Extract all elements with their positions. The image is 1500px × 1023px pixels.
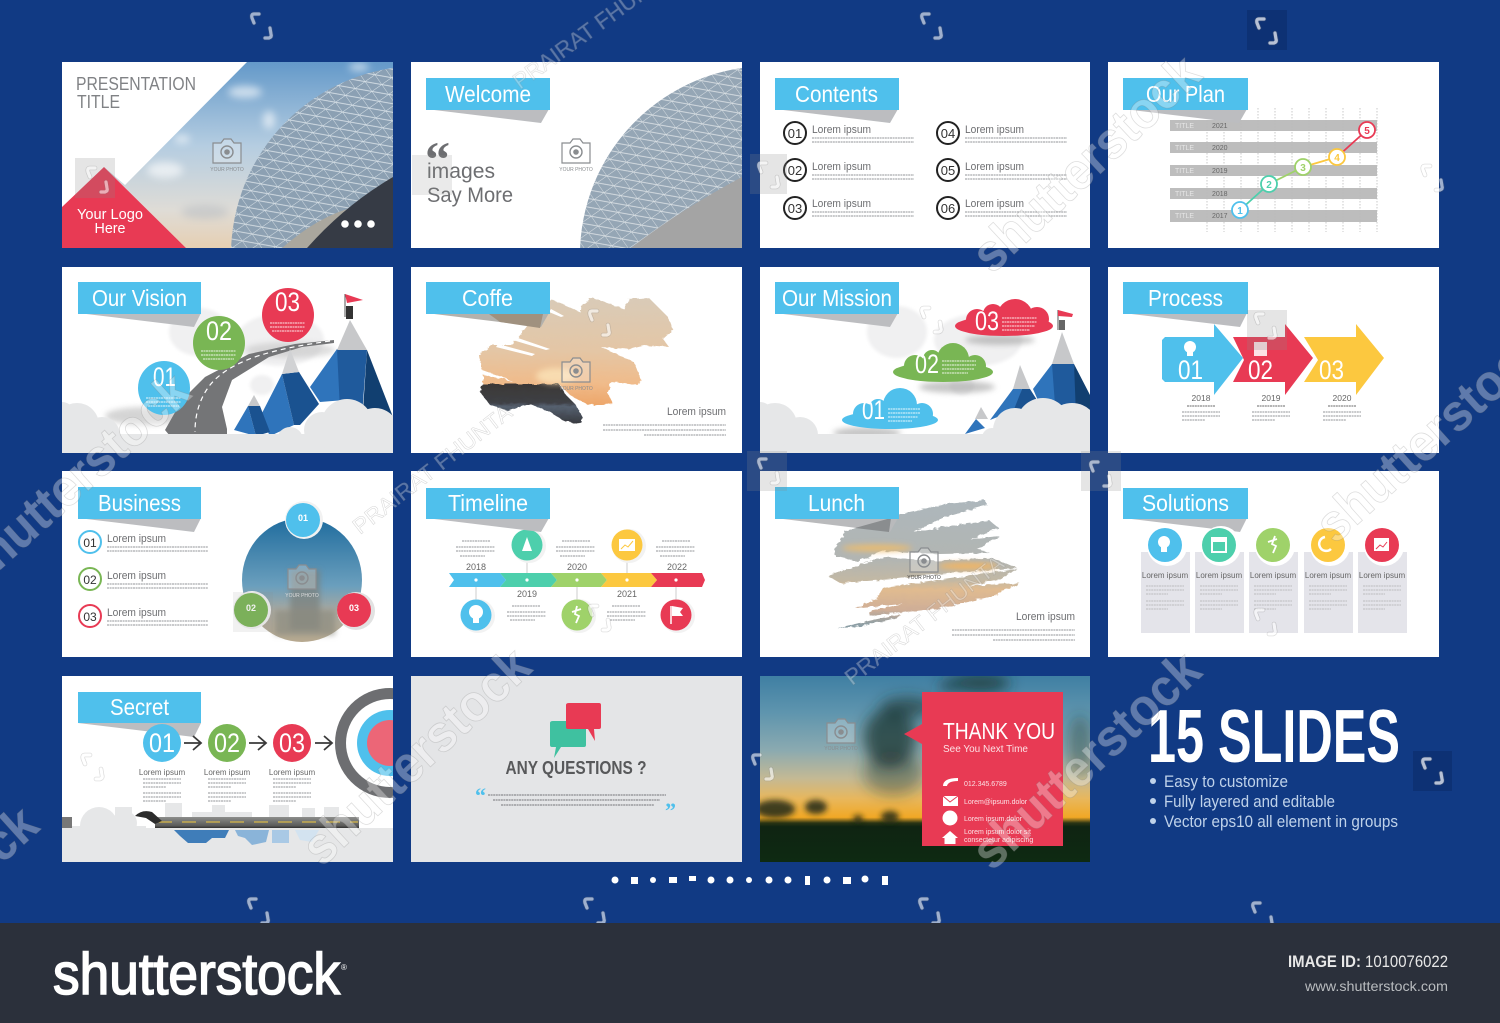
camera placeholder: YOUR PHOTO — [210, 167, 244, 173]
plan row labels: 2017 — [1212, 213, 1228, 220]
image id: IMAGE ID: 1010076022 — [1288, 952, 1448, 971]
quote — [475, 783, 676, 823]
target — [335, 688, 393, 798]
camera placeholder: YOUR PHOTO — [559, 167, 593, 173]
node 01: 01 — [298, 513, 308, 523]
world map — [867, 306, 1022, 395]
header: our plan — [1123, 78, 1248, 123]
plan milestones — [1232, 122, 1375, 218]
cloud shadows — [833, 335, 1035, 439]
circle 02 — [193, 316, 245, 370]
camera placeholder — [559, 358, 593, 392]
plan row labels: 2021 — [1212, 123, 1228, 130]
years: 2022 — [667, 562, 687, 572]
camera placeholder: YOUR PHOTO — [559, 386, 593, 392]
step text: Lorem ipsum — [139, 768, 185, 777]
slide: coffe — [411, 267, 742, 453]
cloud 02 — [893, 343, 993, 382]
step text: Lorem ipsum — [269, 768, 315, 777]
quote: “ — [475, 783, 486, 808]
slide: business: Lorem ipsum — [107, 607, 166, 619]
slide: our plan — [1108, 62, 1439, 248]
quote text: Say More — [427, 184, 513, 207]
plan milestones: 2 — [1266, 180, 1272, 191]
icon strip — [612, 876, 888, 885]
contact details: Lorem@ipsum.dolor — [964, 799, 1028, 806]
solution icons — [1147, 526, 1404, 566]
cloud 03: 03 — [975, 306, 999, 336]
header: process: Process — [1148, 285, 1223, 311]
arrow 02: 02 — [1248, 355, 1273, 385]
header: business: Business — [98, 490, 181, 516]
arrow 03 — [1304, 324, 1384, 395]
circle 03 — [262, 287, 314, 342]
footer bar — [0, 923, 1500, 1023]
solution text: Lorem ipsum — [1359, 571, 1405, 580]
promo bullets: Fully layered and editable — [1164, 792, 1335, 811]
slide: contents: 06 — [941, 201, 955, 216]
contact details — [943, 743, 1033, 844]
header: process — [1123, 282, 1248, 327]
years: 2018 — [466, 562, 486, 572]
process captions: 2018 — [1192, 393, 1211, 403]
header: our mission — [775, 282, 899, 327]
caption: Lorem ipsum — [667, 406, 726, 418]
solution text — [1142, 571, 1405, 609]
header: timeline: Timeline — [448, 490, 528, 516]
mountains — [965, 332, 1090, 434]
step 03 — [273, 724, 311, 762]
contact details: Lorem ipsum dolor sit — [964, 829, 1031, 836]
header: coffe: Coffe — [462, 285, 513, 311]
header: our plan: Our Plan — [1146, 81, 1225, 107]
cloud 03 — [955, 299, 1053, 336]
clouds — [62, 399, 393, 453]
plan row labels: TITLE — [1175, 213, 1194, 220]
slide: our mission — [747, 267, 1099, 457]
step text — [139, 768, 315, 801]
node 03: 03 — [349, 603, 359, 613]
plan milestones: 1 — [1237, 206, 1243, 217]
years — [466, 562, 687, 599]
step 01 — [143, 724, 181, 762]
logo text: Your Logo — [77, 206, 143, 223]
contact details: See You Next Time — [943, 743, 1028, 755]
slide: any questions — [411, 676, 742, 862]
camera placeholder: YOUR PHOTO — [824, 746, 858, 752]
slide: contents: Lorem ipsum — [812, 161, 871, 173]
slide: secret — [62, 676, 393, 862]
header: secret — [78, 692, 201, 737]
arrows — [184, 736, 332, 750]
contact details: Lorem ipsum.dolor — [964, 816, 1023, 823]
footer logo: ® — [341, 963, 347, 972]
slide: contents: 03 — [788, 201, 802, 216]
years: 2021 — [617, 589, 637, 599]
bottom icons — [460, 599, 695, 633]
slide: business: Lorem ipsum — [107, 570, 166, 582]
header: contents: Contents — [795, 81, 878, 107]
plan row labels: 2019 — [1212, 168, 1228, 175]
header: contents — [775, 78, 899, 123]
logo text: Here — [94, 220, 126, 237]
clouds — [760, 398, 1090, 453]
circle 01: 01 — [153, 362, 176, 392]
business list — [79, 531, 101, 627]
contents list — [784, 122, 959, 219]
contact icons — [942, 778, 958, 844]
slide: contents: 05 — [941, 163, 955, 178]
header: timeline — [426, 488, 550, 532]
site url: www.shutterstock.com — [1304, 978, 1448, 994]
promo bullets: Easy to customize — [1164, 772, 1288, 791]
slide: presentation title — [62, 62, 393, 248]
plan row labels: TITLE — [1175, 145, 1194, 152]
arrow 02 — [1233, 324, 1313, 395]
promo bullets — [1150, 772, 1398, 831]
flag — [1058, 310, 1073, 330]
step 03: 03 — [279, 728, 305, 758]
columns — [1141, 552, 1407, 633]
red logo triangle — [62, 167, 186, 248]
header: our vision — [78, 282, 201, 327]
slide: contents: Lorem ipsum — [812, 198, 871, 210]
road — [165, 340, 334, 436]
plan row labels — [1175, 123, 1228, 220]
cloud 01: 01 — [862, 395, 885, 425]
header: our vision: Our Vision — [92, 285, 187, 311]
plan milestones: 5 — [1364, 126, 1370, 137]
slide: contents: 01 — [788, 126, 802, 141]
timeline band — [449, 560, 705, 600]
caption — [952, 611, 1075, 640]
contact details: consectetur adipiscing — [964, 837, 1033, 844]
promo: 15 slides — [1148, 694, 1400, 831]
cloud 02: 02 — [915, 349, 939, 379]
slide: lunch — [760, 471, 1090, 657]
arrow 03: 03 — [1319, 355, 1344, 385]
slide: process — [1108, 267, 1439, 453]
camera placeholder — [285, 565, 319, 599]
slide: business: 02 — [83, 573, 97, 587]
header: welcome — [426, 78, 550, 123]
plan row labels: TITLE — [1175, 123, 1194, 130]
mountains — [234, 320, 393, 436]
header: secret: Secret — [110, 694, 170, 720]
road and skyline — [62, 803, 393, 862]
node 02: 02 — [246, 603, 256, 613]
contact details: 012.345.6789 — [964, 781, 1007, 788]
header: business — [78, 487, 201, 532]
watermark text: PRAIRAT FHUNTA — [840, 550, 1009, 690]
circle 01 — [138, 361, 190, 415]
node 02 — [233, 591, 271, 629]
arrow 01: 01 — [1178, 355, 1203, 385]
footer logo: shutterstock — [53, 942, 341, 1007]
plan milestones: 4 — [1334, 153, 1340, 164]
header: our mission: Our Mission — [782, 285, 892, 311]
watermark text: shutterstock — [961, 44, 1212, 284]
watermark text: shutterstock — [291, 637, 542, 877]
header: lunch — [775, 487, 899, 532]
title text: PRESENTATION — [76, 74, 196, 94]
process captions: 2020 — [1333, 393, 1352, 403]
world map — [169, 308, 324, 395]
plan row labels: TITLE — [1175, 168, 1194, 175]
header: solutions: Solutions — [1142, 490, 1229, 516]
slide: timeline — [411, 471, 742, 657]
solution text: Lorem ipsum — [1305, 571, 1351, 580]
camera placeholder: YOUR PHOTO — [907, 575, 941, 581]
step 02 — [208, 724, 246, 762]
solution text: Lorem ipsum — [1196, 571, 1242, 580]
slide: business: 01 — [83, 536, 97, 550]
camera placeholder — [907, 548, 941, 581]
quote mark: “ — [425, 131, 450, 187]
node 01 — [285, 501, 323, 539]
promo bullets: Vector eps10 all element in groups — [1164, 812, 1398, 831]
circle 02: 02 — [206, 316, 232, 346]
slide: contents: 04 — [941, 126, 955, 141]
brush photo — [828, 500, 1020, 628]
header: lunch: Lunch — [808, 490, 865, 516]
header: solutions — [1123, 488, 1248, 532]
solution text: Lorem ipsum — [1250, 571, 1296, 580]
watermark text: shutterstock — [961, 641, 1212, 881]
red panel — [904, 692, 1063, 846]
quote text: images — [427, 160, 495, 183]
caption: Lorem ipsum — [1016, 611, 1075, 623]
plan chart bars — [1170, 120, 1377, 222]
top icons — [512, 529, 646, 563]
slide: business: 03 — [83, 610, 97, 624]
slide: welcome — [411, 62, 742, 248]
slide: business — [62, 471, 393, 657]
slide: business: Lorem ipsum — [107, 533, 166, 545]
title text: TITLE — [77, 92, 120, 112]
slide: contents: Lorem ipsum — [812, 124, 871, 136]
node 03 — [337, 592, 375, 630]
process captions — [1182, 393, 1361, 420]
timeline notes — [456, 541, 695, 620]
plan milestones: 3 — [1300, 163, 1306, 174]
step 01: 01 — [149, 728, 175, 758]
years: 2019 — [517, 589, 537, 599]
watermark text: PRAIRAT FHUNTA — [348, 399, 517, 539]
slide: contents: Lorem ipsum — [965, 161, 1024, 173]
camera placeholder — [210, 139, 244, 173]
plan row labels: 2020 — [1212, 145, 1228, 152]
slide: contents: Lorem ipsum — [965, 124, 1024, 136]
arrow 01 — [1162, 324, 1243, 395]
slide: contents: 02 — [788, 163, 802, 178]
camera placeholder — [559, 139, 593, 173]
plan row labels: 2018 — [1212, 191, 1228, 198]
thank you heading: THANK YOU — [943, 718, 1055, 744]
watermark tiles — [75, 10, 1452, 791]
plan row labels: TITLE — [1175, 191, 1194, 198]
brush photo — [479, 298, 673, 424]
slide: contents — [760, 62, 1090, 248]
years: 2020 — [567, 562, 587, 572]
camera placeholder — [824, 719, 858, 752]
solution text: Lorem ipsum — [1142, 571, 1188, 580]
sunset photo — [755, 673, 1092, 862]
slide: thank you — [755, 673, 1092, 862]
caption — [603, 406, 726, 435]
quote: ” — [665, 798, 676, 823]
speech bubbles — [550, 703, 601, 758]
slide: our vision — [49, 267, 399, 456]
circle 03: 03 — [275, 287, 300, 317]
header: welcome: Welcome — [445, 81, 531, 107]
cloud 01 — [842, 388, 938, 429]
camera placeholder: YOUR PHOTO — [285, 593, 319, 599]
photo circle — [242, 518, 362, 642]
step 02: 02 — [214, 728, 240, 758]
slide: contents: Lorem ipsum — [965, 198, 1024, 210]
header: coffe — [426, 282, 550, 328]
question heading: ANY QUESTIONS ? — [506, 758, 646, 778]
slide: solutions — [1108, 471, 1439, 657]
process captions: 2019 — [1262, 393, 1281, 403]
flag — [345, 294, 363, 319]
step text: Lorem ipsum — [204, 768, 250, 777]
